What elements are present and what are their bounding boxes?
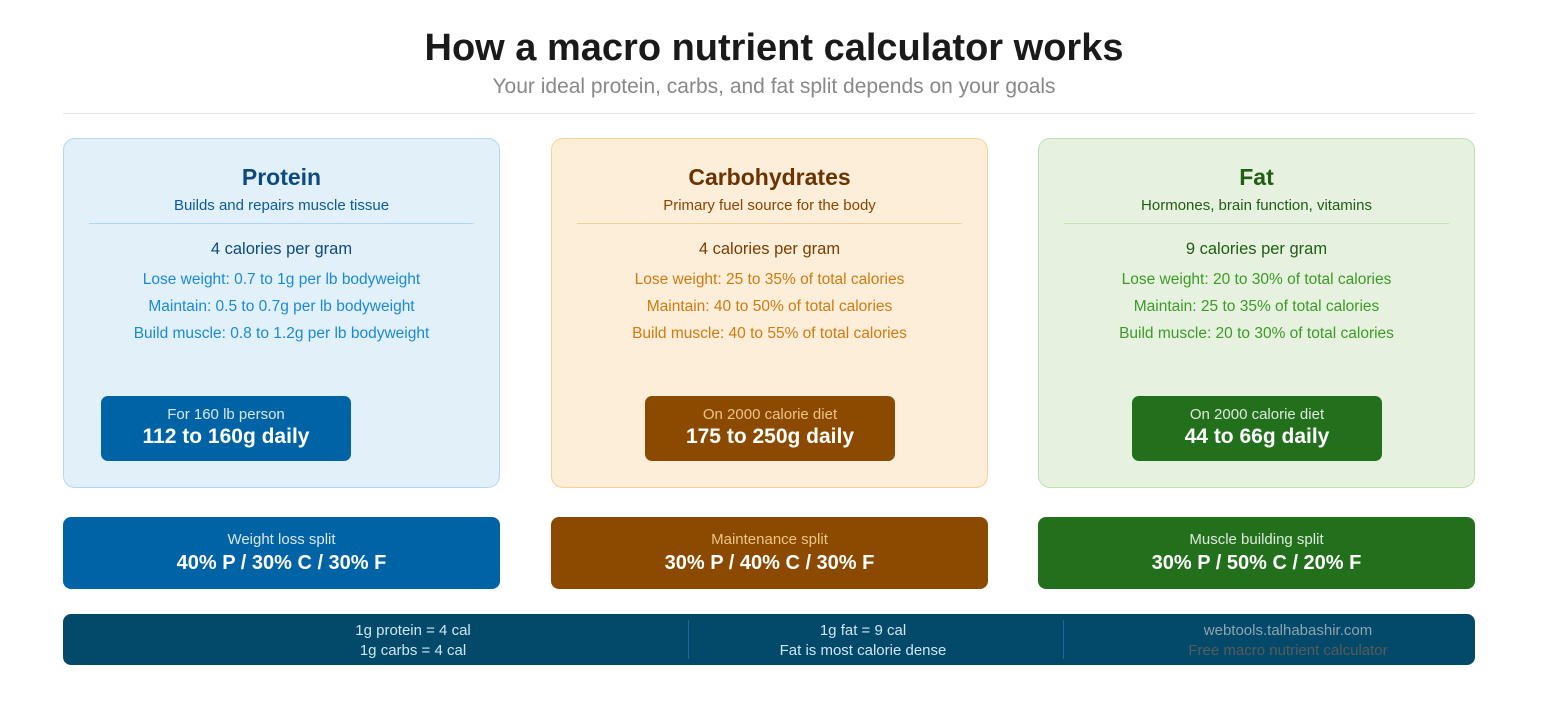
panel: fat xyxy=(1038,138,1475,488)
guideline lines: Maintain: 0.5 to 0.7g per lb bodyweight xyxy=(148,298,415,315)
guideline lines: Build muscle: 40 to 55% of total calories xyxy=(632,325,907,342)
calories: 4 calories per gram xyxy=(211,240,352,258)
subheading: Builds and repairs muscle tissue xyxy=(174,197,389,214)
split: muscle building: 30% P / 50% C / 20% F xyxy=(1152,552,1361,574)
heading: protein: Protein xyxy=(242,164,321,190)
badge: protein: 112 to 160g daily xyxy=(143,425,309,448)
footer: fat cal: Fat is most calorie dense xyxy=(780,642,946,659)
subtitle: Your ideal protein, carbs, and fat split depends on your goals xyxy=(492,75,1056,98)
panel: carbohydrates xyxy=(551,138,988,488)
heading: fat: Fat xyxy=(1239,164,1274,190)
guideline lines xyxy=(1119,271,1394,342)
heading: carbohydrates: Carbohydrates xyxy=(688,164,851,190)
split: maintenance xyxy=(551,517,988,589)
calories: 4 calories per gram xyxy=(699,240,840,258)
footer: credit: Free macro nutrient calculator xyxy=(1188,642,1388,659)
split: weight loss: Weight loss split xyxy=(227,531,336,548)
badge: protein: For 160 lb person xyxy=(167,406,285,423)
guideline lines: Lose weight: 20 to 30% of total calories xyxy=(1122,271,1391,288)
footer: fat cal xyxy=(780,622,946,659)
footer: credit xyxy=(1188,622,1388,659)
badge: carbs xyxy=(645,396,895,461)
title: How a macro nutrient calculator works xyxy=(425,27,1123,69)
split: muscle building xyxy=(1038,517,1475,589)
badge: protein xyxy=(101,396,351,461)
guideline lines: Maintain: 40 to 50% of total calories xyxy=(647,298,892,315)
footer: protein/carbs cal: 1g carbs = 4 cal xyxy=(360,642,466,659)
guideline lines xyxy=(134,271,430,342)
footer bar xyxy=(63,614,1475,665)
split: muscle building: Muscle building split xyxy=(1189,531,1324,548)
footer: fat cal: 1g fat = 9 cal xyxy=(820,622,906,639)
subheading: Hormones, brain function, vitamins xyxy=(1141,197,1372,214)
split: weight loss xyxy=(63,517,500,589)
badge: fat: 44 to 66g daily xyxy=(1185,425,1329,448)
footer: credit: webtools.talhabashir.com xyxy=(1204,622,1372,639)
footer: protein/carbs cal: 1g protein = 4 cal xyxy=(355,622,471,639)
split: weight loss: 40% P / 30% C / 30% F xyxy=(177,552,386,574)
calories: 9 calories per gram xyxy=(1186,240,1327,258)
badge: carbs: On 2000 calorie diet xyxy=(703,406,837,423)
subheading: Primary fuel source for the body xyxy=(663,197,876,214)
split: maintenance: Maintenance split xyxy=(711,531,828,548)
guideline lines: Build muscle: 20 to 30% of total calories xyxy=(1119,325,1394,342)
badge: carbs: 175 to 250g daily xyxy=(686,425,854,448)
guideline lines: Lose weight: 0.7 to 1g per lb bodyweight xyxy=(143,271,420,288)
badge: fat xyxy=(1132,396,1382,461)
split: maintenance: 30% P / 40% C / 30% F xyxy=(665,552,874,574)
guideline lines: Maintain: 25 to 35% of total calories xyxy=(1134,298,1379,315)
guideline lines xyxy=(632,271,907,342)
badge: fat: On 2000 calorie diet xyxy=(1190,406,1324,423)
guideline lines: Build muscle: 0.8 to 1.2g per lb bodyweight xyxy=(134,325,429,342)
footer: protein/carbs cal xyxy=(355,622,471,659)
guideline lines: Lose weight: 25 to 35% of total calories xyxy=(635,271,904,288)
panel: protein xyxy=(63,138,500,488)
